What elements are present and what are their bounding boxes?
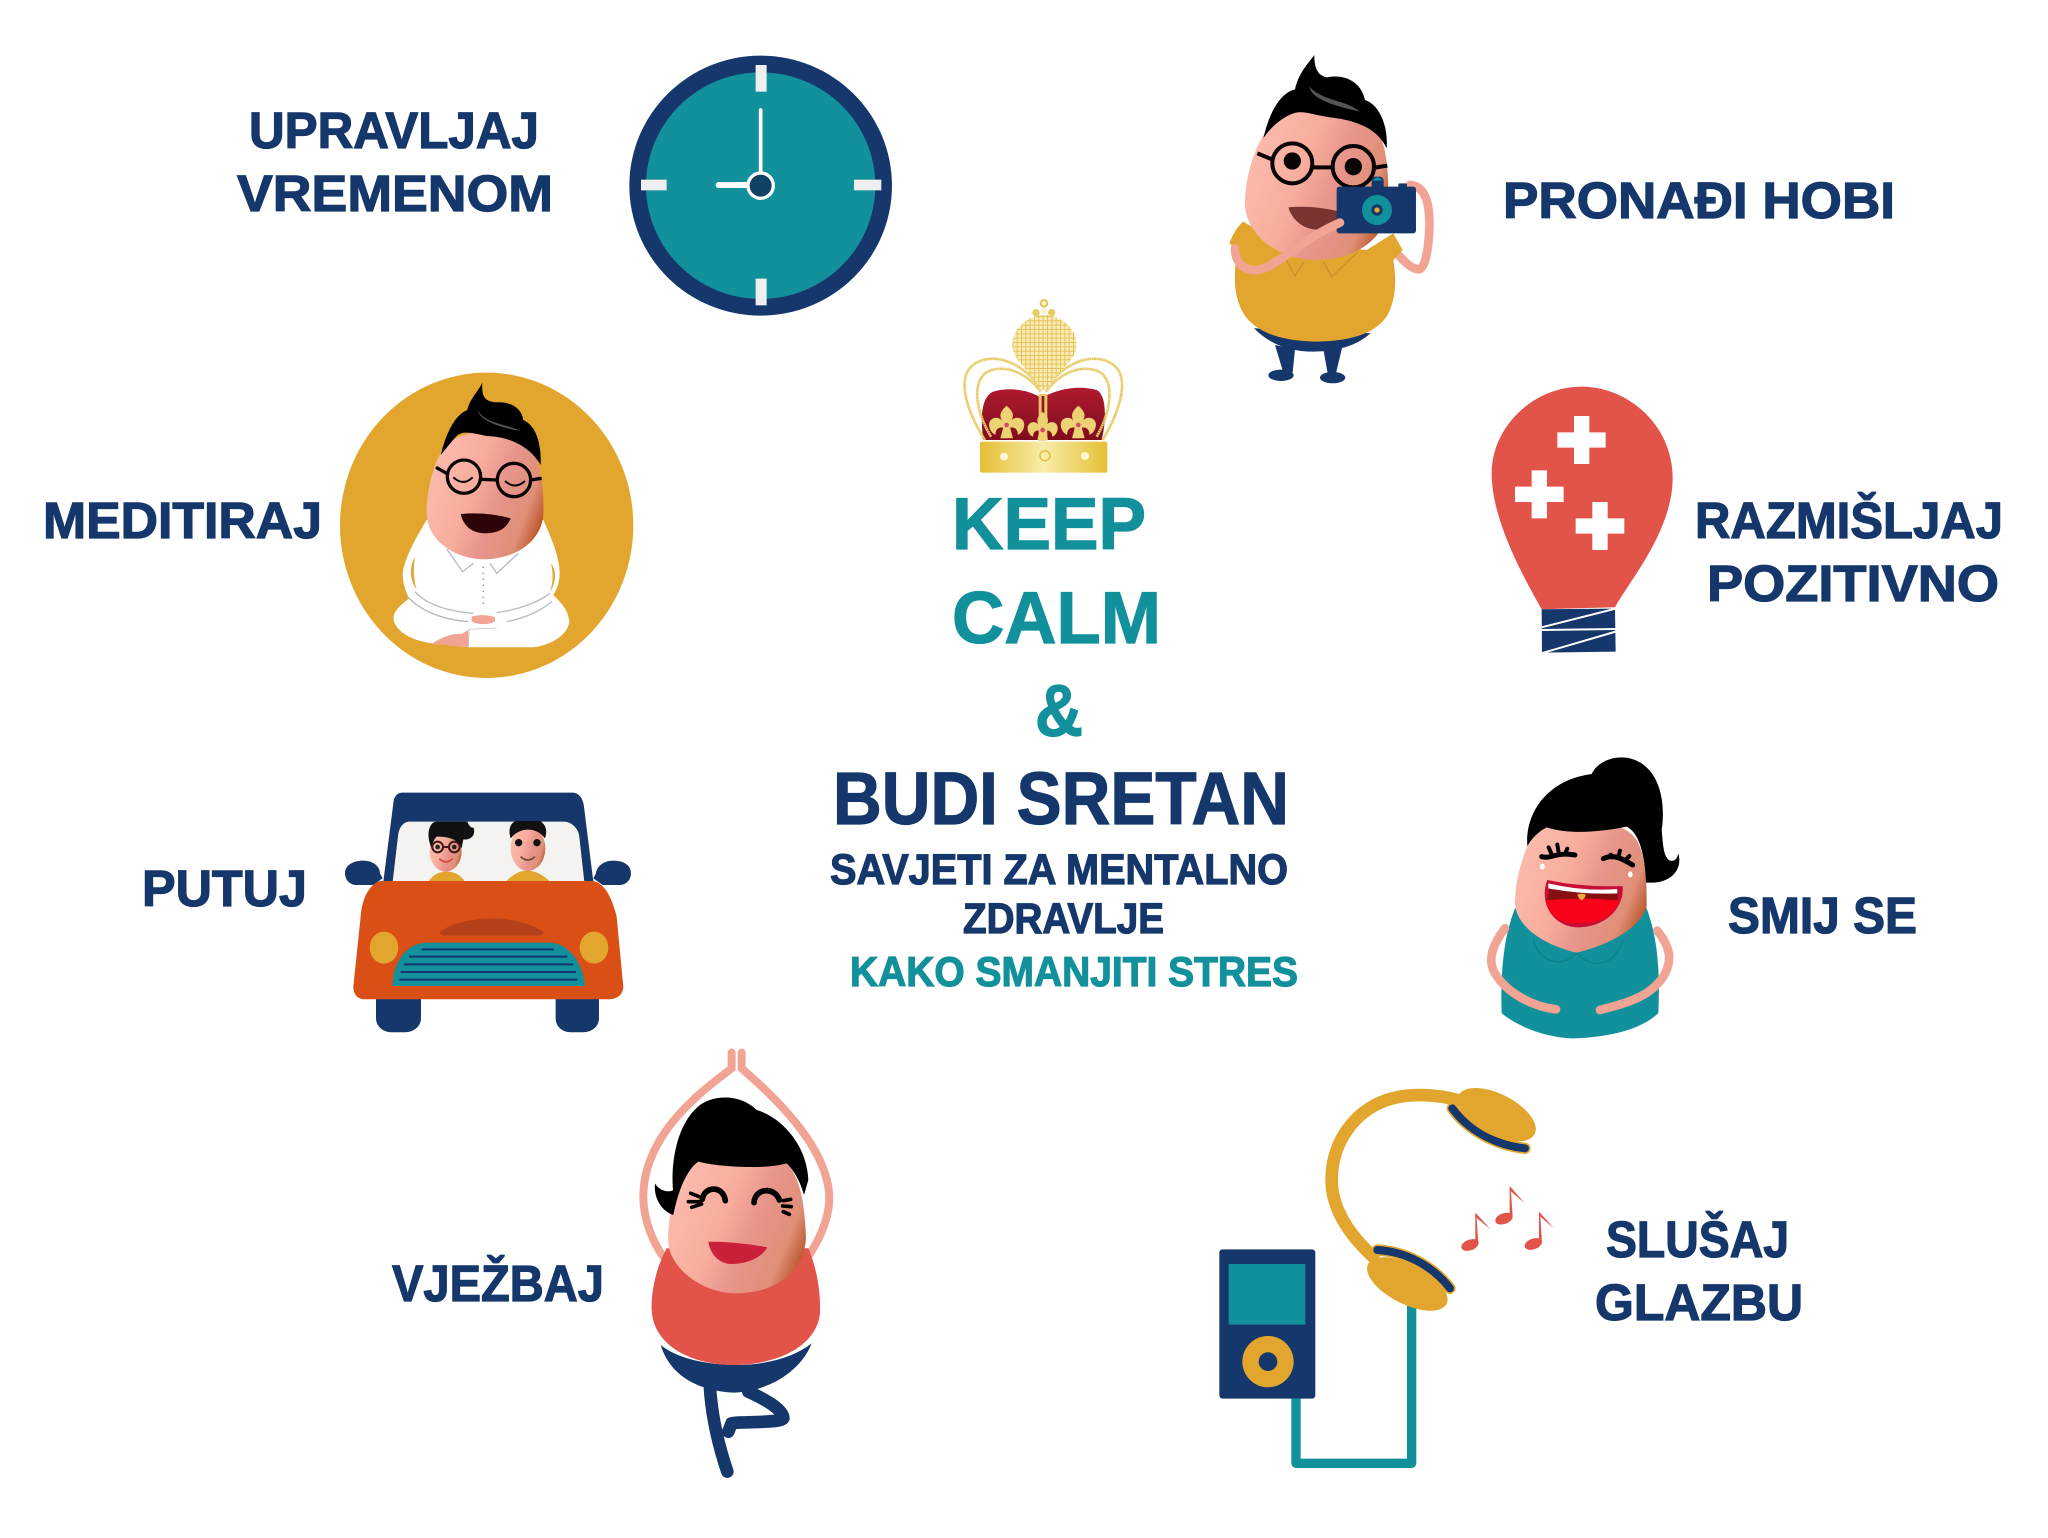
mouth xyxy=(461,513,511,533)
mouth xyxy=(1545,880,1623,927)
icon: clock xyxy=(629,56,892,316)
grille xyxy=(392,943,585,986)
label: laugh: SMIJ SE xyxy=(1728,887,1917,944)
top xyxy=(652,1248,820,1365)
label: think positive: POZITIVNO xyxy=(1707,555,1999,612)
legs xyxy=(710,1388,727,1472)
cable xyxy=(1296,1300,1412,1463)
windshield xyxy=(393,822,584,882)
hair xyxy=(1527,757,1679,883)
teal top xyxy=(1501,908,1659,1038)
mouth xyxy=(1288,207,1340,230)
mouth xyxy=(708,1242,767,1264)
label: listen to music: SLUŠAJ xyxy=(1606,1210,1789,1268)
right arm xyxy=(1397,185,1429,269)
subtitle: stress: KAKO SMANJITI STRES xyxy=(850,948,1298,995)
car body xyxy=(353,881,623,999)
left arm xyxy=(1235,223,1340,270)
top ear cup xyxy=(1452,1108,1525,1148)
gold circle xyxy=(340,373,633,678)
title: calm: CALM xyxy=(952,578,1161,659)
pants xyxy=(661,1343,812,1393)
hair xyxy=(655,1097,808,1215)
hair xyxy=(441,383,541,465)
head xyxy=(1515,821,1647,953)
label: manage time xyxy=(237,102,553,222)
arms xyxy=(643,1053,829,1257)
head xyxy=(668,1162,806,1293)
head xyxy=(427,431,543,559)
tires xyxy=(345,793,631,1032)
camera xyxy=(1372,177,1384,192)
glasses and closed eyes xyxy=(436,460,542,497)
label: manage time: VREMENOM xyxy=(237,165,553,222)
headlights xyxy=(370,932,398,964)
label: find a hobby: PRONAĐI HOBI xyxy=(1503,172,1895,229)
icon: light bulb xyxy=(1492,387,1673,653)
label: manage time: UPRAVLJAJ xyxy=(249,102,539,159)
label: listen to music xyxy=(1595,1210,1803,1331)
subtitle: line 2: ZDRAVLJE xyxy=(963,895,1164,943)
character: meditating man xyxy=(340,373,633,678)
roof xyxy=(383,793,593,882)
title: ampersand: & xyxy=(1035,671,1083,752)
player xyxy=(1219,1249,1315,1399)
character: photographer xyxy=(1229,55,1429,383)
character: yoga woman xyxy=(643,1053,829,1472)
icon: music player and headphones xyxy=(1219,1077,1554,1463)
white robe xyxy=(394,520,569,647)
subtitle: line 1: SAVJETI ZA MENTALNO xyxy=(830,846,1288,894)
hands xyxy=(472,615,495,624)
label: meditate: MEDITIRAJ xyxy=(43,492,322,549)
eyes xyxy=(1542,845,1633,865)
glasses xyxy=(1257,143,1387,187)
title: keep: KEEP xyxy=(952,484,1146,565)
label: listen to music: GLAZBU xyxy=(1595,1274,1803,1331)
pants and shoes xyxy=(1254,328,1371,383)
head xyxy=(1245,110,1388,260)
hair xyxy=(1263,55,1387,148)
bottom ear cup xyxy=(1377,1250,1450,1288)
passengers xyxy=(428,821,550,882)
label: think positive: RAZMIŠLJAJ xyxy=(1695,491,2003,549)
title block xyxy=(830,484,1298,995)
headband xyxy=(1332,1095,1460,1260)
label: think positive xyxy=(1695,491,2003,612)
label: travel: PUTUJ xyxy=(142,860,307,917)
mirrors xyxy=(345,861,383,885)
music notes xyxy=(1460,1186,1554,1253)
shirt xyxy=(1229,222,1403,342)
icon: car xyxy=(345,793,631,1032)
label: exercise: VJEŽBAJ xyxy=(392,1254,604,1312)
arms xyxy=(1491,928,1556,1009)
icon: crown xyxy=(965,300,1122,473)
eyes xyxy=(688,1189,791,1214)
character: laughing woman xyxy=(1491,757,1679,1038)
title: budi sretan: BUDI SRETAN xyxy=(833,757,1289,840)
